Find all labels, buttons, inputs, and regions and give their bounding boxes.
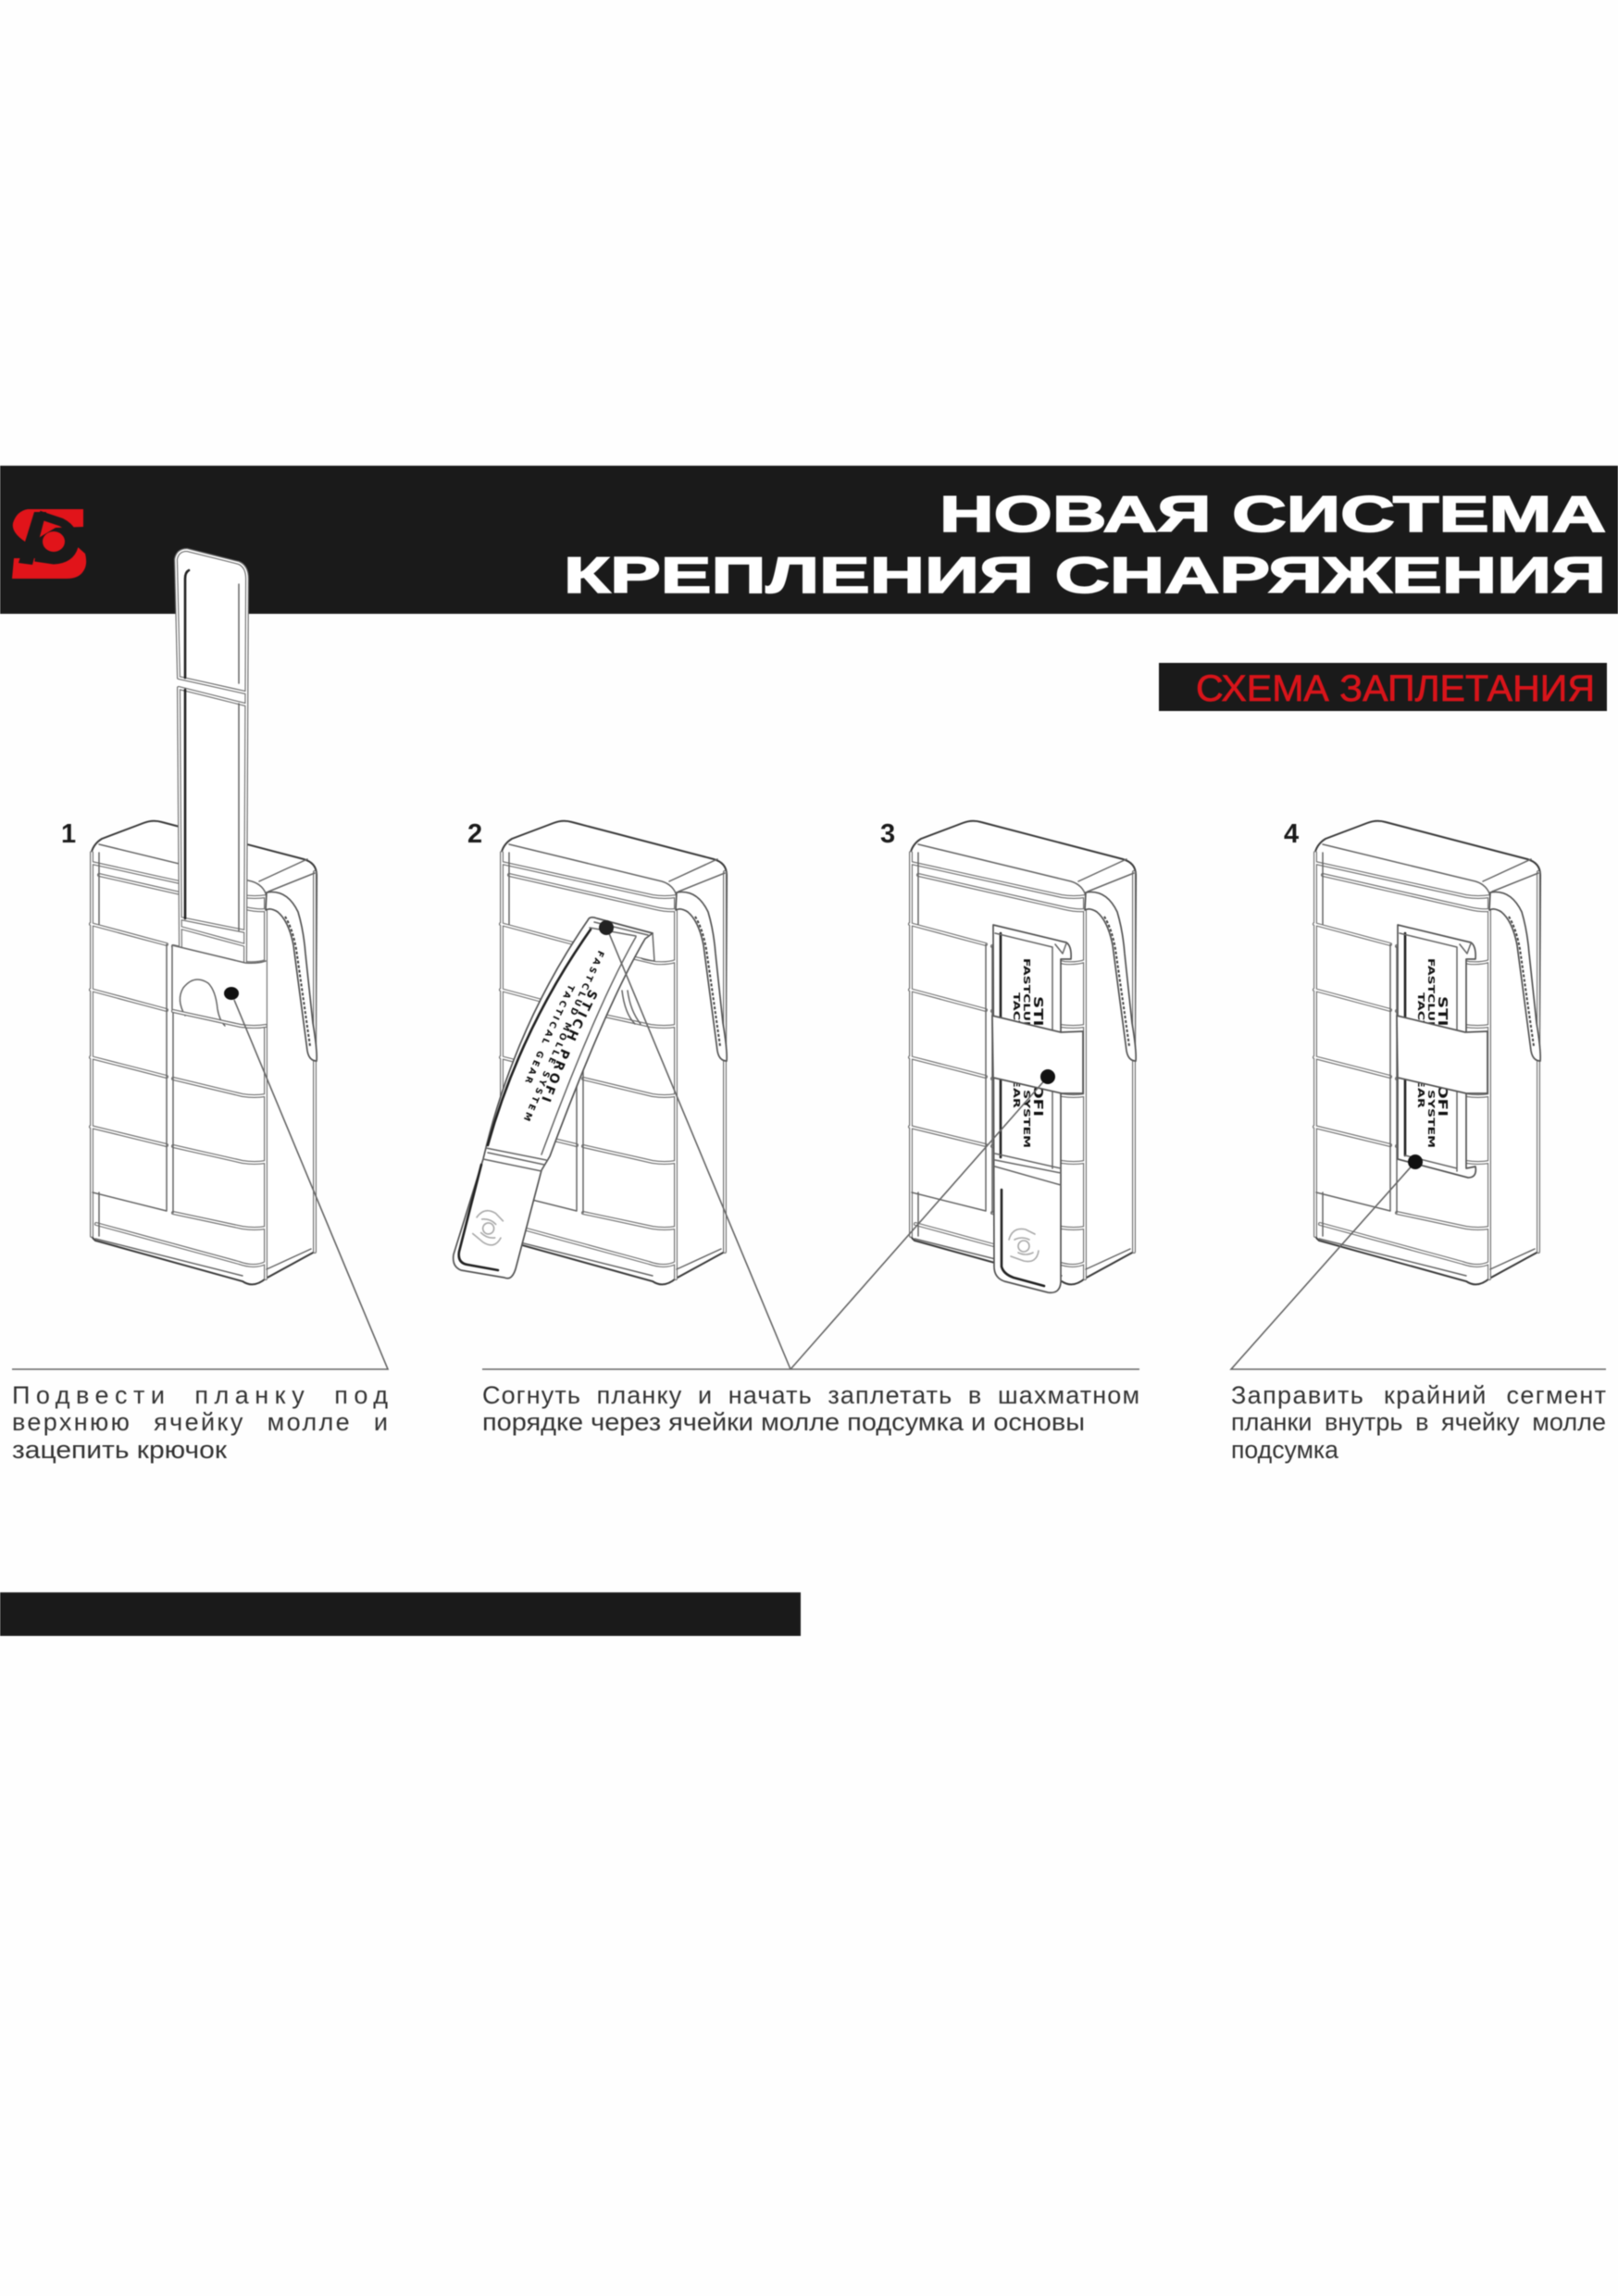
leader with dot 2 [599, 920, 790, 1369]
panel: step 2 [452, 819, 791, 1369]
leader with dot 3 [790, 1069, 1055, 1369]
caption 2: порядке через ячейки молле подсумка и основы [482, 1408, 1085, 1436]
pouch body 2 [501, 821, 727, 1284]
strap raised above pouch [176, 550, 247, 963]
caption 1: Подвести планку под [12, 1381, 388, 1409]
caption 4: Заправить крайний сегмент [1231, 1381, 1606, 1409]
panel: step 3 [482, 819, 1139, 1436]
caption 4: подсумка [1231, 1436, 1339, 1464]
caption 4: планки внутрь в ячейку молле [1231, 1408, 1606, 1436]
pouch body 3 [910, 821, 1136, 1284]
strap mini logo 2 [469, 1207, 508, 1248]
strap lettering 4: STICH PROFI [1435, 996, 1450, 1117]
woven strap 3 [993, 925, 1071, 1292]
strap lettering 3: TACTICAL GEAR [1011, 992, 1021, 1109]
pouch body 4 [1314, 821, 1540, 1284]
title: КРЕПЛЕНИЯ СНАРЯЖЕНИЯ [564, 546, 1606, 604]
title: НОВАЯ СИСТЕМА [940, 485, 1606, 543]
molle flap with hook [172, 945, 266, 1027]
step number 2: 2 [467, 819, 482, 849]
title [564, 485, 1606, 604]
icon: brand logo [12, 509, 86, 579]
strap lettering 3: STICH PROFI [1030, 996, 1045, 1117]
step number 4: 4 [1284, 819, 1299, 849]
strap lettering 2: FASTCLUD MOLLE SYSTEM [523, 950, 605, 1122]
panel: step 1 [12, 550, 388, 1464]
caption 1: зацепить крючок [12, 1436, 227, 1464]
strap lettering 2: TACTICAL GEAR [524, 985, 576, 1083]
caption 1: верхнюю ячейку молле и [12, 1408, 388, 1436]
pouch body 1 [91, 821, 317, 1284]
caption 2 [482, 1369, 1139, 1436]
leader with dot 1 [12, 987, 388, 1369]
bent strap [452, 916, 653, 1279]
strap lettering 4 [1415, 958, 1450, 1148]
header band [0, 466, 1618, 614]
subtitle badge: СХЕМА ЗАПЛЕТАНИЯ [1196, 668, 1595, 709]
strap mini logo 3 [1009, 1229, 1039, 1262]
caption 2: Согнуть планку и начать заплетать в шахматном [482, 1381, 1139, 1409]
molle band over strap 4 [1397, 1016, 1487, 1093]
strap lettering 4: TACTICAL GEAR [1415, 992, 1425, 1109]
tucked strap 4 [1398, 925, 1475, 1178]
strap lettering 4: FASTCLUD MOLLE SYSTEM [1425, 958, 1436, 1148]
leader with dot 4 [1231, 1154, 1606, 1369]
footer band [0, 1592, 801, 1636]
strap lettering 3 [1011, 958, 1045, 1148]
hook fragment [622, 933, 654, 1024]
panel: step 4 [1231, 819, 1606, 1464]
strap lettering 2: STICH PROFI [541, 989, 598, 1103]
step number 1: 1 [61, 819, 76, 849]
strap lettering 3: FASTCLUD MOLLE SYSTEM [1021, 958, 1031, 1148]
step number 3: 3 [880, 819, 895, 849]
molle band over strap 3 [992, 1016, 1083, 1093]
caption 1 [12, 1381, 388, 1464]
caption 4 [1231, 1381, 1606, 1464]
